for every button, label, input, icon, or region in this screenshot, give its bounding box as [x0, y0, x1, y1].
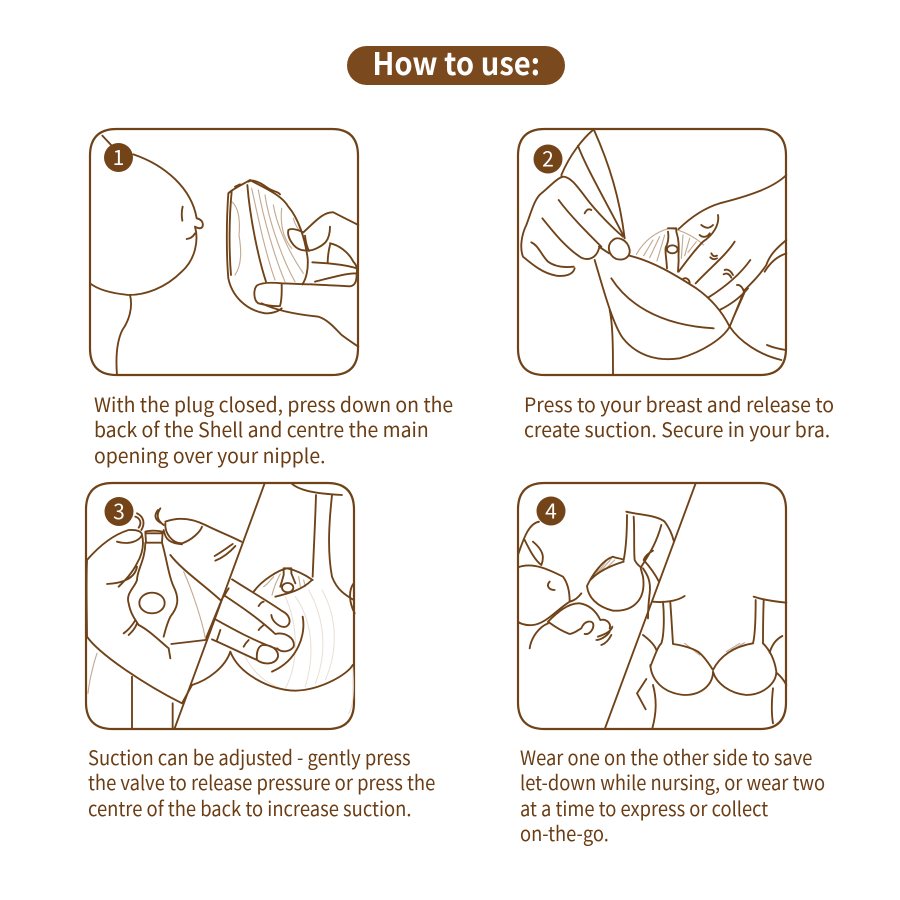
text: step 2: create suction. Secure in your bra.	[524, 414, 830, 443]
text: step 1: With the plug closed, press down on the	[94, 389, 453, 418]
text: step 3: Suction can be adjusted - gently press	[88, 742, 411, 771]
text: step 3: centre of the back to increase suction.	[88, 793, 411, 822]
badge 2: 2	[542, 144, 554, 174]
badge 3: 3	[113, 496, 125, 526]
text: step 1: opening over your nipple.	[94, 440, 325, 469]
badge 1	[104, 142, 133, 172]
badge 2	[534, 144, 562, 174]
text: step 4: at a time to express or collect	[520, 793, 768, 822]
text: step 4: Wear one on the other side to save	[520, 742, 812, 771]
text: step 2: Press to your breast and release to	[524, 389, 834, 418]
text: step 4: let-down while nursing, or wear two	[520, 767, 825, 796]
panel 4: wearing illustration	[518, 483, 786, 729]
badge 3	[104, 496, 134, 526]
title	[347, 46, 565, 85]
badge 1: 1	[113, 142, 124, 172]
text: step 1	[94, 389, 453, 469]
text: step 4: on-the-go.	[520, 818, 609, 847]
badge 4: 4	[545, 496, 557, 526]
badge 4	[536, 496, 566, 526]
title: How to use:	[372, 39, 540, 84]
text: step 4	[520, 742, 825, 847]
panel 3: adjust suction illustration	[86, 483, 355, 729]
text: step 1: back of the Shell and centre the main	[94, 414, 429, 443]
text: step 3: the valve to release pressure or press the	[88, 767, 435, 796]
text: step 2	[524, 389, 834, 443]
text: step 3	[88, 742, 435, 822]
panel 1: press shell illustration	[90, 129, 358, 375]
panel 2: press to breast illustration	[518, 129, 786, 375]
